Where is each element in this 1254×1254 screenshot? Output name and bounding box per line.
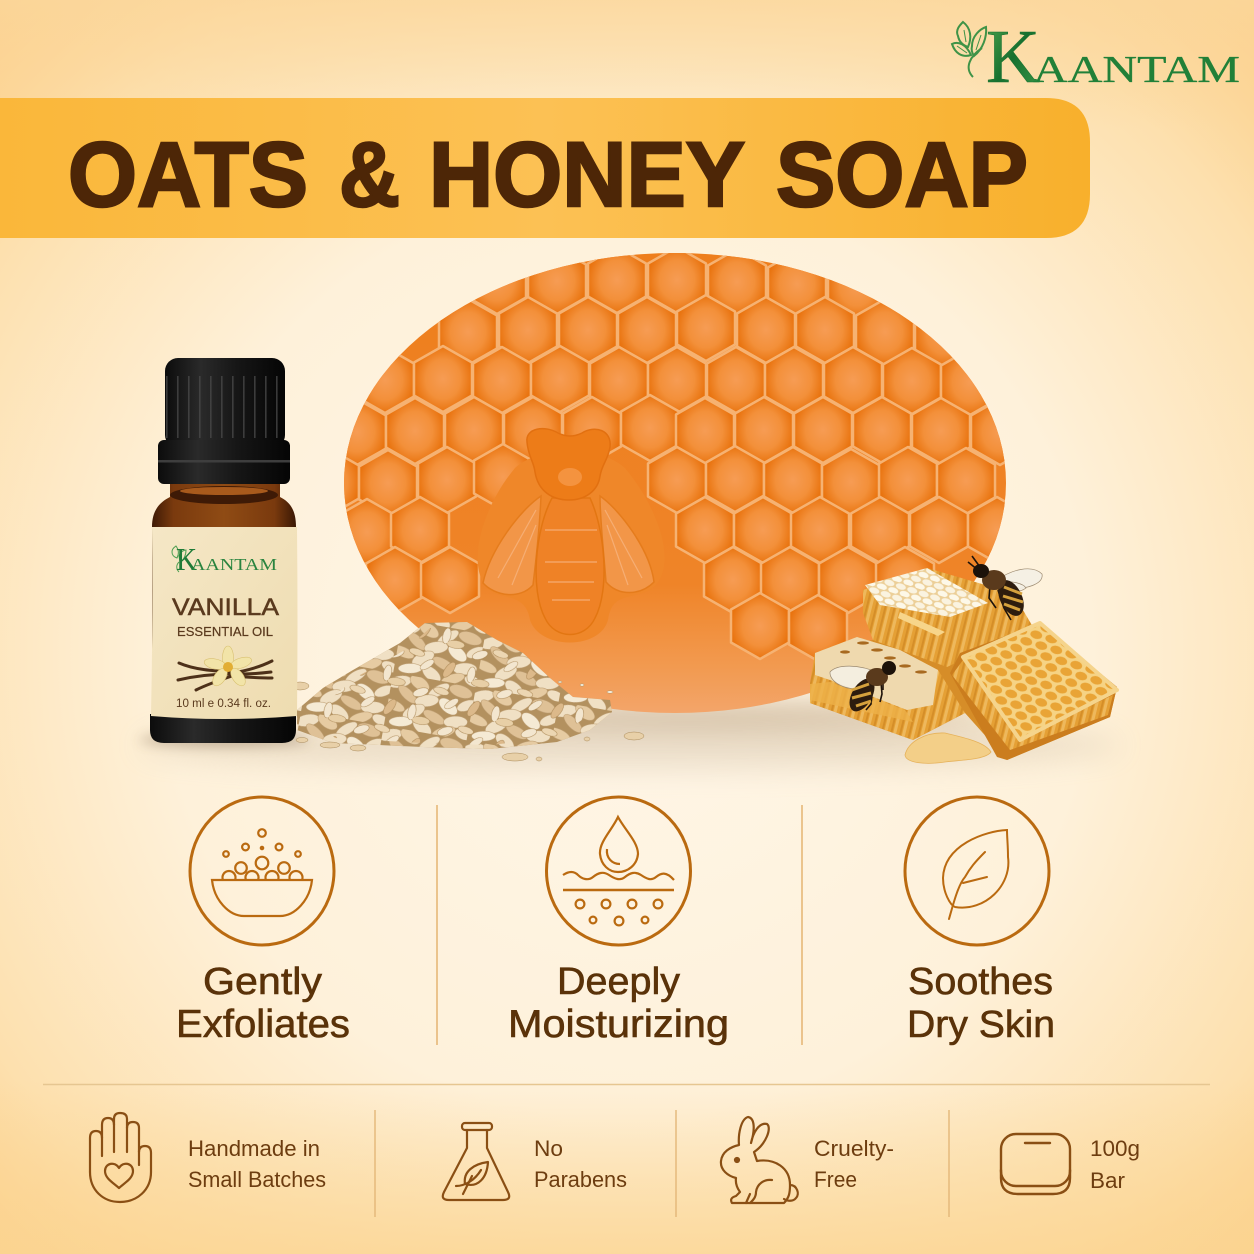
bottle glass	[152, 484, 296, 720]
heading: Gently	[203, 961, 322, 1003]
text line 2: Small Batches	[188, 1167, 326, 1192]
heading: Soothes	[908, 961, 1053, 1003]
icon: soap bar	[1001, 1134, 1070, 1194]
essential oil bottle	[150, 358, 298, 743]
icon: hand with heart	[90, 1113, 151, 1202]
comb: right block	[950, 623, 1117, 760]
label volume: 10 ml e 0.34 fl. oz.	[176, 698, 271, 710]
logo: Kaantam: AANTAM	[1033, 49, 1240, 91]
text: Handmade in	[188, 1136, 320, 1161]
icon: water drop over skin	[546, 797, 690, 945]
logo: Kaantam	[952, 15, 1240, 99]
title: SOAP	[776, 124, 1028, 226]
comb: amber base behind the pieces	[810, 568, 1117, 760]
label subtitle: ESSENTIAL OIL	[177, 625, 273, 639]
text line 2: Parabens	[534, 1167, 627, 1192]
heading: Deeply	[557, 961, 680, 1003]
label logo: AANTAM	[191, 555, 277, 574]
text: 100g	[1090, 1136, 1140, 1161]
icon: flask with leaf	[443, 1123, 509, 1200]
feature: handmade	[90, 1113, 326, 1202]
text line 2: Free	[814, 1167, 857, 1192]
icon: leaf	[905, 797, 1049, 945]
text: Cruelty-	[814, 1136, 894, 1161]
text: No	[534, 1136, 563, 1161]
label logo: K	[176, 541, 197, 577]
icon: rabbit	[721, 1117, 798, 1203]
title: OATS	[68, 124, 308, 226]
text line 2: Bar	[1090, 1168, 1126, 1193]
title: HONEY	[429, 124, 745, 226]
feature: cruelty-free	[721, 1117, 894, 1203]
label product name: VANILLA	[172, 594, 280, 621]
oats pile	[291, 622, 644, 761]
embossed bee	[478, 429, 665, 642]
comb: top chunk	[863, 568, 1033, 667]
benefit: gently exfoliates	[176, 797, 350, 1046]
soap bar with honeycomb and bee	[344, 253, 1006, 713]
title banner	[0, 98, 1090, 238]
label logo	[172, 541, 277, 577]
comb: lower left chunk	[810, 637, 965, 740]
floor shadows	[139, 704, 1120, 769]
feature: 100g bar	[1001, 1134, 1140, 1194]
section divider lines	[437, 805, 802, 1045]
benefit: deeply moisturizing	[508, 797, 729, 1046]
honey drip	[905, 733, 991, 763]
vanilla flower and pods	[178, 646, 272, 690]
icon: oats bowl	[190, 797, 334, 945]
honeycomb relief	[344, 253, 1005, 660]
logo: Kaantam: K	[986, 15, 1040, 99]
bee on lower comb	[830, 661, 896, 716]
benefit: soothes dry skin	[905, 797, 1055, 1046]
heading line 2: Dry Skin	[907, 1004, 1055, 1046]
bee on top comb	[968, 556, 1042, 620]
bottle base	[150, 714, 296, 743]
bottle cap	[158, 358, 290, 484]
honeycomb pieces with bees	[810, 556, 1117, 763]
bottle label	[151, 527, 298, 719]
title	[68, 124, 1028, 226]
heading line 2: Moisturizing	[508, 1003, 729, 1046]
heading line 2: Exfoliates	[176, 1003, 350, 1046]
feature: no parabens	[443, 1123, 627, 1200]
title: &	[339, 124, 400, 226]
bottom strip dividers	[43, 1084, 1210, 1217]
